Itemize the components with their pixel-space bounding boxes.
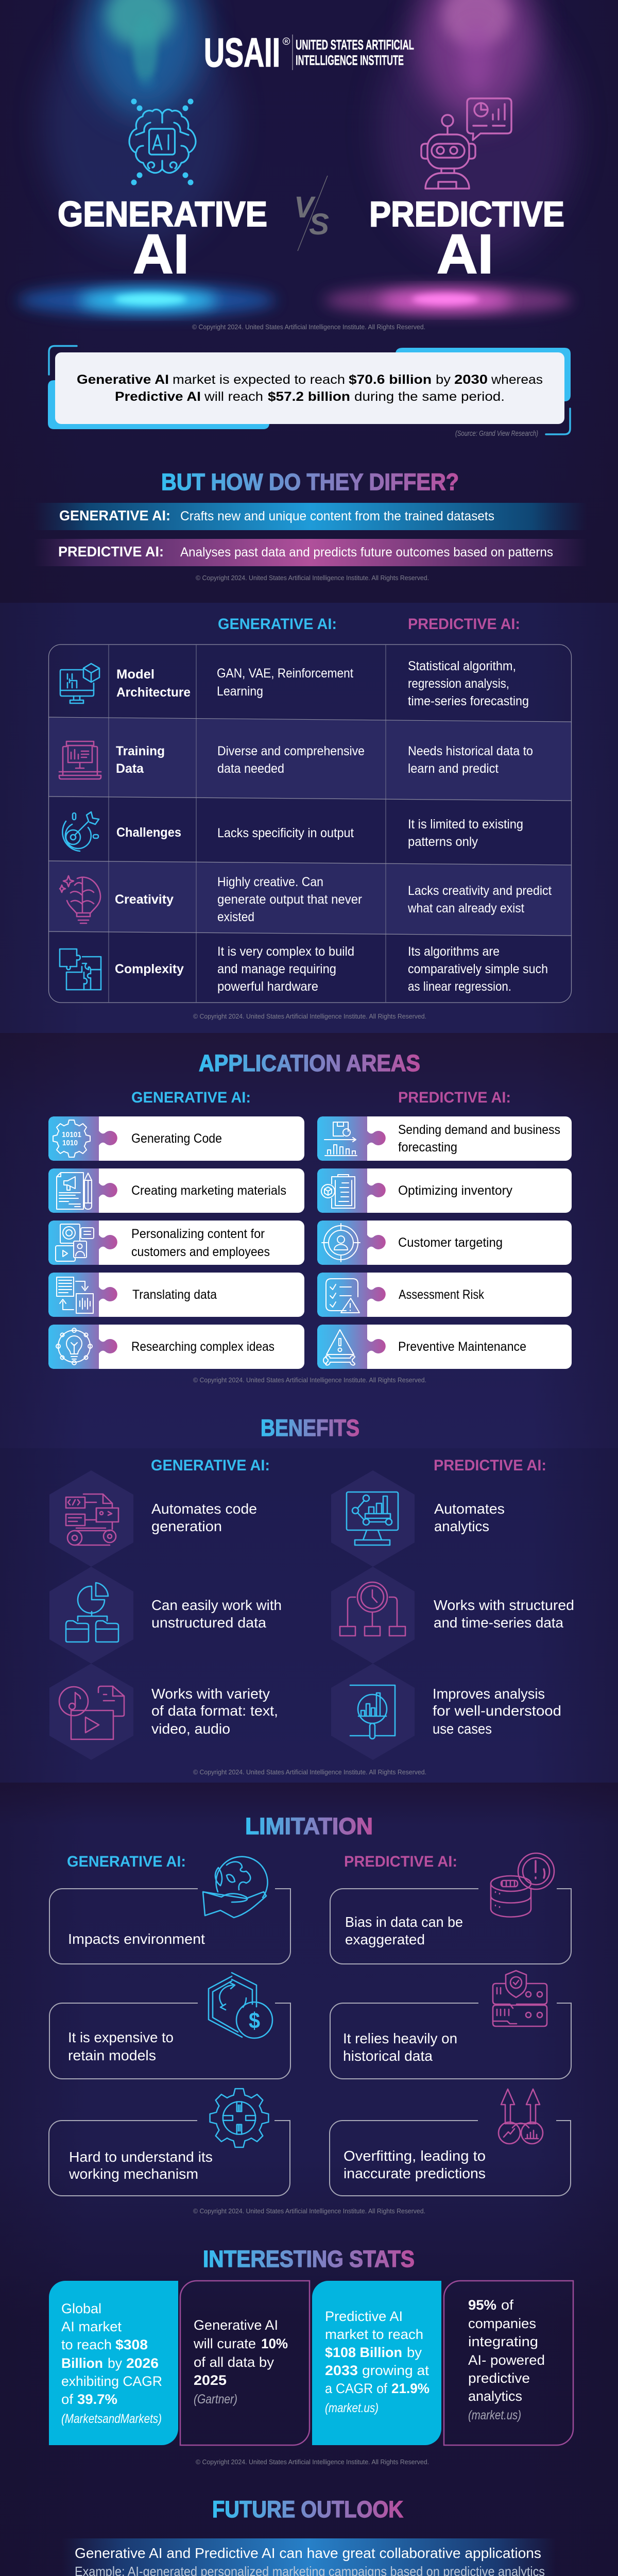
icon: upward arrows and gauges: [499, 2089, 543, 2144]
row: model architecture: Statistical algorithm,: [408, 659, 516, 673]
limitation: opacity: working mechanism: [68, 2166, 198, 2182]
stat card: companies integrating AI: analytics: [468, 2388, 522, 2404]
card: inventory: Optimizing inventory: [398, 1183, 512, 1198]
floor glow: generative: [18, 285, 276, 316]
copyright: © Copyright 2024. United States Artificial Intelligence Institute. All Rights Reserved.: [193, 1768, 426, 1776]
card: researching ideas: [48, 1325, 304, 1369]
icon: brain bulb: [60, 876, 100, 923]
card: inventory: [317, 1168, 572, 1213]
card: personalizing content: customers and employees: [131, 1245, 270, 1259]
icon: demand forecast: [324, 1122, 357, 1156]
row: training data: Training: [116, 744, 165, 758]
panel: hero: [18, 0, 574, 316]
stat card: companies integrating AI: predictive: [468, 2370, 530, 2386]
row: training data: learn and predict: [408, 761, 499, 776]
callout text: 2030: [454, 372, 488, 387]
definition bar: generative: Crafts new and unique content from the trained datasets: [180, 509, 494, 523]
row: complexity: comparatively simple such: [408, 962, 548, 976]
card: assessment risk: Assessment Risk: [399, 1287, 484, 1302]
stat card: global AI market: Billion: [61, 2355, 103, 2371]
title: generative AI: [58, 194, 267, 285]
column heading: predictive: PREDICTIVE AI:: [434, 1457, 546, 1474]
limitation: historical data: It relies heavily on: [343, 2030, 457, 2046]
row: model architecture: GAN, VAE, Reinforcement: [217, 666, 353, 681]
stat card: companies integrating AI: [444, 2281, 573, 2445]
row: challenges: Challenges: [116, 825, 181, 840]
icon: translation: [57, 1277, 93, 1313]
versus mark: [294, 176, 329, 251]
icon: binary gear: [53, 1120, 90, 1157]
heading: future outlook: FUTURE OUTLOOK: [212, 2496, 403, 2522]
callout text: during the same period.: [354, 389, 505, 404]
stat card: generative AI data: 2025: [194, 2372, 227, 2388]
heading: benefits: BENEFITS: [261, 1415, 359, 1441]
row: training data: Needs historical data to: [408, 744, 533, 758]
limitation: opacity: [49, 2089, 290, 2196]
icon: code conveyor: [66, 1494, 118, 1545]
row: model architecture: [60, 659, 529, 708]
icon: target and dart: [62, 812, 99, 851]
limitation: bias: [330, 1853, 571, 1964]
benefit: unstructured data: unstructured data: [151, 1615, 266, 1631]
panel: market callout: [48, 346, 571, 434]
limitation: bias: exaggerated: [345, 1931, 425, 1947]
card: personalizing content: [48, 1221, 304, 1265]
callout text: $70.6 billion: [349, 372, 432, 387]
stat card: generative AI data: of all data by: [194, 2354, 274, 2370]
benefit: analytics: [331, 1470, 505, 1567]
spotlight: generative: [44, 0, 234, 247]
logo: USAII: [204, 29, 280, 75]
title: predictive AI: [369, 194, 564, 285]
stat card: global AI market: by: [108, 2355, 122, 2371]
stat card: companies integrating AI: integrating: [468, 2334, 538, 2349]
card: personalizing content: Personalizing content for: [131, 1227, 265, 1241]
icon: analytics monitor: [347, 1492, 398, 1545]
callout text: will reach: [204, 389, 263, 404]
icon: secure servers: [493, 1971, 547, 2026]
benefit: unstructured data: [49, 1567, 282, 1664]
callout text: [77, 372, 543, 404]
stat card: companies integrating AI: companies: [468, 2316, 536, 2331]
row: complexity: and manage requiring: [217, 962, 336, 976]
card: assessment risk: [317, 1273, 572, 1317]
benefit: analysis: Improves analysis: [433, 1686, 545, 1702]
benefit: code generation: Automates code: [151, 1501, 257, 1517]
row: model architecture: regression analysis,: [408, 676, 509, 691]
limitation: bias: Bias in data can be: [345, 1914, 463, 1930]
outlook bar: collaboration: Generative AI and Predictive AI can have great collaborative applications: [75, 2545, 541, 2561]
row: creativity: generate output that never: [217, 892, 362, 907]
card: demand forecasting: forecasting: [398, 1140, 457, 1155]
copyright: © Copyright 2024. United States Artificial Intelligence Institute. All Rights Reserved.: [193, 1012, 426, 1020]
card: demand forecasting: Sending demand and business: [398, 1123, 560, 1137]
stat card: predictive AI market: by: [407, 2345, 422, 2360]
spotlight: predictive: [379, 0, 574, 258]
column heading: predictive: PREDICTIVE AI:: [408, 616, 520, 633]
stat card: global AI market: to reach: [61, 2337, 112, 2352]
benefit: data formats: [49, 1664, 278, 1760]
logo: R: [285, 39, 288, 44]
callout text: whereas: [491, 372, 543, 387]
row: complexity: as linear regression.: [408, 979, 511, 994]
stat card: generative AI data: Generative AI: [194, 2317, 278, 2333]
benefit: analysis: use cases: [433, 1721, 492, 1737]
icon: inventory clipboard: [321, 1175, 355, 1208]
benefit: data formats: video, audio: [151, 1721, 230, 1737]
definition bar: generative: GENERATIVE AI:: [59, 507, 170, 523]
card: marketing materials: [48, 1168, 304, 1213]
logo: [204, 29, 414, 75]
stat card: global AI market: of: [61, 2392, 73, 2407]
card: researching ideas: Researching complex ideas: [131, 1340, 274, 1354]
source note: (Source: Grand View Research): [455, 429, 538, 438]
stat card: global AI market: exhibiting CAGR: [61, 2374, 162, 2389]
limitation: retraining cost: [49, 1973, 290, 2079]
heading: how they differ: BUT HOW DO THEY DIFFER?: [161, 469, 459, 495]
row: challenges: Lacks specificity in output: [217, 826, 354, 840]
stat card: companies integrating AI: 95%: [468, 2297, 496, 2313]
column heading: predictive: PREDICTIVE AI:: [398, 1089, 511, 1106]
stat card: predictive AI market: Predictive AI: [325, 2309, 403, 2324]
column heading: generative: GENERATIVE AI:: [67, 1853, 186, 1870]
icon: database alert: [491, 1853, 554, 1917]
icon: model cost: [209, 1973, 272, 2038]
limitation: retraining cost: It is expensive to: [68, 2029, 174, 2045]
outlook bar: collaboration: [62, 2538, 556, 2576]
stat card: predictive AI market: a CAGR of: [325, 2381, 387, 2396]
definition bar: generative: [33, 503, 587, 530]
row: training data: Diverse and comprehensive: [217, 744, 365, 758]
benefit: structured data: Works with structured: [434, 1597, 574, 1613]
icon: warning and wrench: [323, 1330, 355, 1365]
icon: marketing document and pencil: [57, 1173, 92, 1209]
stat card: global AI market: 39.7%: [77, 2392, 117, 2407]
card: generating code: Generating Code: [131, 1131, 222, 1146]
icon: customer target: [322, 1224, 360, 1262]
limitation: historical data: historical data: [343, 2048, 433, 2064]
benefit: code generation: generation: [151, 1518, 222, 1534]
column heading: generative: GENERATIVE AI:: [151, 1457, 270, 1474]
stat card: global AI market: $308: [115, 2337, 148, 2352]
column heading: predictive: PREDICTIVE AI:: [344, 1853, 457, 1870]
column heading: generative: GENERATIVE AI:: [131, 1089, 251, 1106]
row: complexity: powerful hardware: [217, 979, 318, 994]
row: model architecture: Learning: [217, 684, 263, 699]
stat card: companies integrating AI: of: [501, 2297, 514, 2313]
icon: idea network: [56, 1328, 92, 1365]
floor glow: predictive: [324, 286, 572, 315]
benefit: structured data: and time-series data: [434, 1615, 563, 1631]
icon: globe in hand: [203, 1857, 268, 1918]
icon: risk checklist: [326, 1279, 359, 1313]
card: marketing materials: Creating marketing materials: [131, 1183, 286, 1198]
icon: laptop training board: [59, 741, 101, 779]
row: challenges: It is limited to existing: [408, 817, 523, 832]
icon: robot with chart bubble: [421, 98, 511, 189]
card: generating code: [48, 1116, 304, 1161]
row: training data: [59, 741, 533, 779]
card: preventive maintenance: [317, 1325, 572, 1369]
logo: UNITED STATES ARTIFICIAL: [296, 37, 414, 53]
icon: magnifier report: [350, 1685, 395, 1739]
copyright: © Copyright 2024. United States Artificial Intelligence Institute. All Rights Reserved.: [193, 2207, 425, 2215]
heading: application areas: APPLICATION AREAS: [199, 1050, 420, 1076]
limitation: overfitting: [330, 2089, 571, 2196]
versus mark: S: [309, 208, 329, 241]
stat card: predictive AI market: 21.9%: [391, 2381, 430, 2396]
title: predictive AI: AI: [437, 223, 493, 285]
logo: INTELLIGENCE INSTITUTE: [296, 53, 404, 68]
stat card: generative AI data: 10%: [261, 2336, 288, 2351]
title: predictive AI: PREDICTIVE: [369, 194, 564, 234]
stat card: predictive AI market: [312, 2281, 441, 2445]
stat card: global AI market: [49, 2281, 178, 2445]
copyright: © Copyright 2024. United States Artificial Intelligence Institute. All Rights Reserved.: [193, 1376, 426, 1384]
card: preventive maintenance: Preventive Maintenance: [398, 1340, 526, 1354]
table grid: [48, 645, 572, 1003]
icon: monitor and cube: [60, 664, 99, 703]
stat card: generative AI data: will curate: [193, 2336, 256, 2351]
benefit: data formats: Works with variety: [151, 1686, 270, 1702]
benefit: analytics: Automates: [434, 1501, 505, 1517]
icon: media formats: [59, 1686, 124, 1739]
limitation: environment: [49, 1857, 290, 1964]
row: challenges: [62, 812, 523, 851]
stat card: global AI market: Global: [61, 2301, 101, 2316]
heading: limitation: LIMITATION: [245, 1813, 373, 1839]
panel: comparison table: [48, 616, 572, 1003]
row: creativity: what can already exist: [407, 901, 524, 916]
stat card: predictive AI market: (market.us): [325, 2401, 379, 2415]
card: demand forecasting: [317, 1116, 572, 1161]
stat card: global AI market: 2026: [126, 2355, 159, 2371]
icon: AI brain: [129, 99, 196, 185]
title: generative AI: AI: [133, 223, 189, 285]
copyright: © Copyright 2024. United States Artificial Intelligence Institute. All Rights Reserved.: [192, 323, 425, 331]
icon: puzzle pieces: [60, 949, 101, 990]
limitation: opacity: Hard to understand its: [69, 2149, 213, 2165]
row: creativity: Lacks creativity and predict: [408, 884, 552, 898]
stat card: global AI market: (MarketsandMarkets): [61, 2412, 162, 2426]
stat card: generative AI data: [180, 2281, 310, 2445]
card: customer targeting: Customer targeting: [398, 1235, 503, 1250]
copyright: © Copyright 2024. United States Artificial Intelligence Institute. All Rights Reserved.: [196, 574, 429, 582]
icon: model cost: $: [249, 2008, 260, 2033]
stat card: predictive AI market: growing at: [362, 2363, 430, 2378]
row: model architecture: Model: [116, 667, 154, 682]
definition bar: predictive: PREDICTIVE AI:: [58, 544, 164, 560]
title: generative AI: GENERATIVE: [58, 194, 267, 234]
stat card: predictive AI market: $108 Billion: [325, 2345, 402, 2360]
icon: binary gear: 10101: [62, 1130, 81, 1139]
row: training data: data needed: [217, 761, 284, 776]
card: translating data: Translating data: [132, 1287, 217, 1302]
limitation: historical data: [330, 1971, 571, 2079]
benefit: code generation: [49, 1470, 257, 1567]
row: complexity: [60, 944, 548, 994]
row: complexity: It is very complex to build: [217, 944, 354, 959]
stat card: companies integrating AI: (market.us): [468, 2408, 521, 2422]
row: challenges: patterns only: [408, 835, 478, 849]
benefit: analysis: for well-understood: [433, 1703, 561, 1719]
copyright: © Copyright 2024. United States Artificial Intelligence Institute. All Rights Reserved.: [196, 2458, 429, 2466]
row: model architecture: time-series forecasting: [408, 694, 529, 708]
heading: interesting stats: INTERESTING STATS: [203, 2246, 415, 2272]
row: training data: Data: [116, 761, 144, 776]
row: model architecture: Architecture: [116, 685, 191, 700]
row: creativity: Creativity: [115, 892, 174, 907]
row: creativity: [60, 875, 552, 924]
icon: clock hierarchy: [340, 1582, 405, 1636]
benefit: unstructured data: Can easily work with: [151, 1597, 282, 1613]
column heading: generative: GENERATIVE AI:: [218, 616, 337, 633]
stat card: companies integrating AI: AI- powered: [468, 2352, 545, 2368]
benefit: analytics: analytics: [434, 1518, 489, 1534]
limitation: environment: Impacts environment: [68, 1931, 205, 1947]
callout text: Predictive AI: [115, 389, 201, 404]
icon: pie and folders: [66, 1583, 118, 1642]
definition bar: predictive: [33, 539, 587, 566]
versus mark: V: [294, 191, 316, 224]
callout text: by: [436, 372, 451, 387]
row: creativity: Highly creative. Can: [217, 875, 323, 889]
limitation: overfitting: Overfitting, leading to: [344, 2148, 486, 2164]
card: customer targeting: [317, 1221, 572, 1265]
icon: gear with hands: [210, 2089, 268, 2147]
definition bar: predictive: Analyses past data and predicts future outcomes based on patterns: [180, 545, 553, 560]
limitation: retraining cost: retain models: [68, 2047, 156, 2063]
stat card: generative AI data: (Gartner): [194, 2392, 237, 2406]
benefit: structured data: [331, 1567, 574, 1664]
callout text: Generative AI: [77, 372, 169, 387]
row: complexity: Its algorithms are: [408, 944, 500, 959]
benefit: analysis: [331, 1664, 561, 1760]
stat card: predictive AI market: 2033: [325, 2363, 358, 2378]
icon: binary gear: 1010: [62, 1139, 78, 1147]
stat card: predictive AI market: market to reach: [325, 2327, 423, 2342]
limitation: overfitting: inaccurate predictions: [344, 2165, 486, 2181]
icon: personalized content: [56, 1224, 94, 1261]
callout text: market is expected to reach: [173, 372, 345, 387]
stat card: global AI market: AI market: [61, 2319, 122, 2334]
card: translating data: [48, 1273, 304, 1317]
row: creativity: existed: [217, 910, 254, 924]
benefit: data formats: of data format: text,: [151, 1703, 278, 1719]
callout text: $57.2 billion: [268, 389, 350, 404]
row: complexity: Complexity: [115, 962, 184, 976]
